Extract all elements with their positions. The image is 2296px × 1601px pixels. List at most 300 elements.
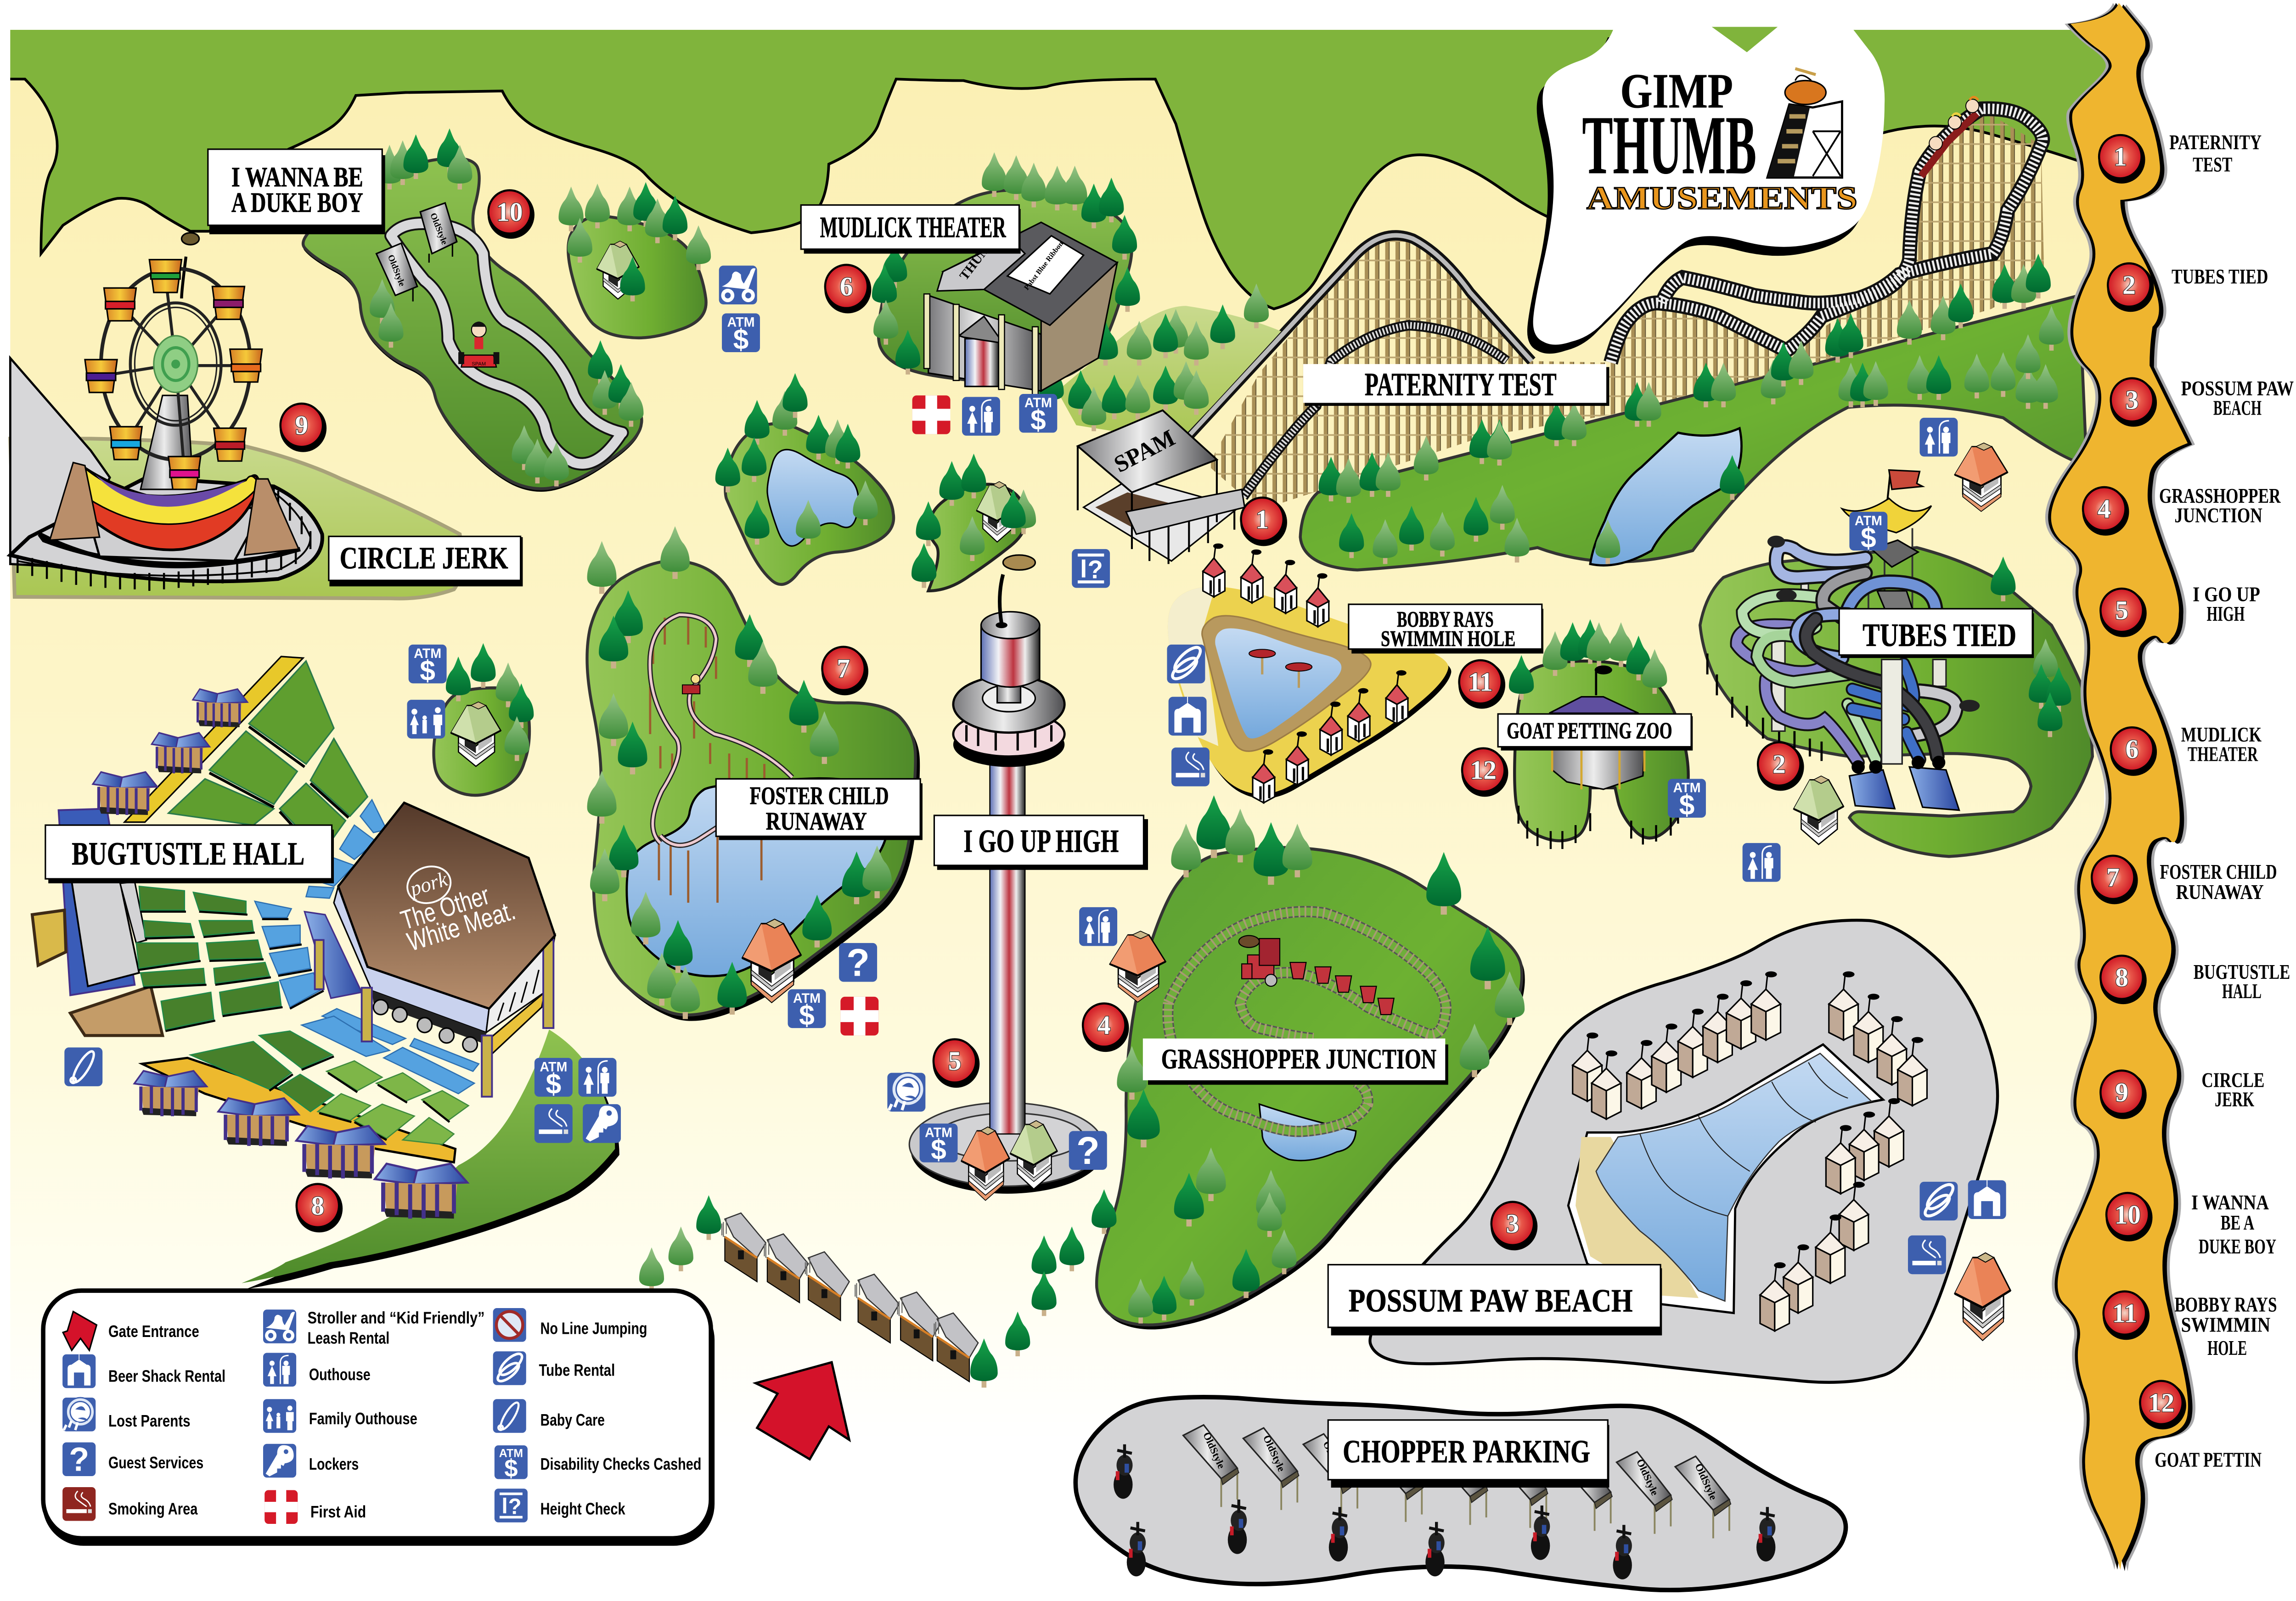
Foster Child Runaway island [587, 526, 920, 1021]
icon: smoking [1908, 1236, 1946, 1274]
badge 8: 8 [311, 1191, 324, 1220]
badge 3 [1491, 1201, 1537, 1250]
legend: lockers [263, 1444, 359, 1477]
hill under the coaster [1300, 295, 2087, 570]
columns [315, 940, 553, 1097]
orange outhouse [743, 919, 801, 1003]
label: Grasshopper Junction [1143, 1039, 1448, 1085]
sign: OldStyle 2 [420, 203, 457, 263]
icon: ATM [722, 313, 760, 355]
grey loop [1823, 573, 1956, 736]
entry 8 [2099, 955, 2290, 1004]
tower and poles [1772, 528, 1946, 764]
fence [1707, 653, 1822, 761]
badge 7: 7 [837, 653, 850, 684]
icon: lockers [583, 1104, 621, 1143]
icon: lost parents [887, 1073, 925, 1112]
badge 6: 6 [840, 271, 853, 302]
legend: family outhouse: Family Outhouse [309, 1410, 417, 1428]
logo: Gimp Thumb Amusements: THUMB [1582, 98, 1756, 191]
trees [446, 643, 534, 761]
entry 5: I GO UP [2193, 583, 2260, 606]
entry 6: MUDLICK [2181, 723, 2262, 746]
theater building [924, 222, 1117, 395]
blue arch [1797, 582, 1936, 658]
entry 1 [2098, 131, 2262, 184]
icon: ATM [788, 989, 826, 1031]
label: Bobby Rays Swimmin Hole: BOBBY RAYS [1397, 607, 1494, 632]
entry 8: HALL [2222, 980, 2262, 1003]
swing base [39, 534, 300, 566]
entry 11: SWIMMIN [2181, 1313, 2270, 1337]
top cylinder [981, 625, 1040, 687]
badge 2: 2 [1773, 749, 1786, 779]
stage blue [59, 809, 135, 995]
entry 9: JERK [2215, 1088, 2254, 1111]
legend: tube rental [493, 1350, 615, 1385]
label: I Wanna Be A Duke Boy [208, 149, 385, 234]
slide tubes [1737, 547, 1956, 763]
entry 11 [2102, 1290, 2277, 1359]
entry 7 [2091, 854, 2277, 904]
icon: outhouse [579, 1058, 616, 1097]
badge 4 [1082, 1002, 1129, 1052]
icon: ATM: $ [1861, 522, 1876, 554]
beach cabanas [1573, 972, 1927, 1331]
icon: guest services: ? [1076, 1129, 1100, 1172]
badge 2 [1757, 741, 1804, 791]
parking sheds: OldStyle [1201, 1430, 1227, 1471]
island trees [872, 152, 1269, 431]
wheel rims [101, 269, 250, 473]
gate entrance arrow [755, 1362, 849, 1459]
icon: ATM: $ [1679, 789, 1694, 820]
small island near Bugtustle [434, 643, 534, 795]
icon: ATM [409, 645, 447, 686]
map icons [64, 265, 2006, 1274]
legend: stroller: Leash Rental [308, 1329, 389, 1347]
lake island [715, 373, 894, 584]
Swimmin Hole [1168, 544, 1451, 803]
Spam station: SPAM [1110, 425, 1179, 478]
legend: disability checks cashed: $ [504, 1455, 518, 1482]
entry 1: PATERNITY [2169, 131, 2262, 154]
Paternity Test coaster [1189, 97, 2087, 570]
label: I Go Up High: I GO UP HIGH [963, 823, 1119, 859]
theater building: THUMB [957, 234, 999, 283]
parking sheds: OldStyle [1693, 1461, 1719, 1502]
icon: beer shack [1169, 697, 1207, 736]
green hills background [0, 15, 2123, 309]
cabanas [1203, 544, 1408, 803]
shaft [990, 761, 1025, 1134]
label: Tubes Tied: TUBES TIED [1863, 618, 2016, 653]
roof advertisement: The Other [398, 880, 493, 936]
legend: smoking area [62, 1487, 198, 1521]
badge 1: 1 [1255, 504, 1269, 534]
blue seating [255, 800, 479, 1094]
entrance gate row [722, 1213, 978, 1382]
entry 6: THEATER [2188, 742, 2258, 765]
icon: outhouse [1919, 418, 1958, 456]
wheel tower [141, 395, 193, 489]
platform [10, 477, 322, 581]
logo coaster [1767, 68, 1842, 178]
badge 10: 10 [496, 197, 523, 227]
outhouse: Tubes Tied upper [1955, 443, 2008, 511]
water tables [1249, 649, 1312, 688]
legend: disability checks cashed [495, 1445, 701, 1482]
label: Bobby Rays Swimmin Hole [1349, 604, 1543, 653]
label: Chopper Parking [1328, 1420, 1609, 1488]
legend: lost parents [62, 1398, 191, 1432]
ribbon [2045, 3, 2195, 1571]
blue side block [304, 912, 362, 998]
icon: smoking [1171, 747, 1210, 786]
label: Bobby Rays Swimmin Hole: SWIMMIN HOLE [1381, 627, 1515, 651]
logo: Gimp Thumb Amusements [1527, 27, 1885, 354]
roof advertisement [389, 845, 519, 957]
trees [715, 373, 878, 545]
light seating [318, 1061, 468, 1145]
lavender top loop [1776, 547, 1865, 578]
label: Goat Petting Zoo [1498, 714, 1693, 751]
label: I Wanna Be A Duke Boy: I WANNA BE [231, 162, 363, 193]
legend: beer shack rental: Beer Shack Rental [108, 1367, 225, 1385]
lift hill track [1189, 236, 1531, 436]
I Go Up High tower [909, 555, 1104, 1201]
label: I Go Up High [934, 815, 1148, 870]
badge 5: 5 [948, 1046, 961, 1076]
icon: outhouse [1743, 843, 1781, 882]
plaza [911, 1107, 1104, 1194]
entry 10: I WANNA [2191, 1191, 2269, 1214]
sign: OldStyle 2: OldStyle [428, 212, 449, 246]
lower blue [1852, 664, 1919, 759]
label: Possum Paw Beach: POSSUM PAW BEACH [1349, 1283, 1632, 1319]
green tubes [1743, 595, 1876, 759]
sign: OldStyle 1: OldStyle [386, 253, 407, 288]
hall facade [334, 886, 489, 1033]
slide tips [1767, 536, 1980, 712]
mini coaster [650, 615, 792, 903]
icon: first aid [912, 395, 951, 434]
Bugtustle Hall [32, 657, 619, 1289]
entry 2: TUBES TIED [2172, 265, 2268, 288]
spotlights [373, 1000, 478, 1052]
legend: outhouse [263, 1353, 371, 1387]
legend: height check: Height Check [540, 1500, 625, 1518]
icon: ATM: ATM [540, 1060, 567, 1074]
island with green outhouse [912, 454, 1036, 591]
legend: gate entrance [63, 1312, 199, 1350]
entry 8: 8 [2115, 962, 2128, 992]
pond [1259, 1104, 1356, 1161]
legend: no line jumping: No Line Jumping [540, 1319, 647, 1337]
label: Paternity Test [1303, 364, 1609, 406]
kart track [391, 223, 622, 464]
map number badges [279, 189, 1804, 1250]
entry 11: 11 [2112, 1298, 2137, 1328]
dark tube [1806, 619, 1937, 757]
front pole [1882, 659, 1902, 764]
Grasshopper Junction island [1097, 795, 1525, 1330]
badge 5 [933, 1038, 979, 1088]
legend panel [42, 1291, 715, 1546]
small island with outhouse [559, 182, 711, 338]
label: Goat Petting Zoo: GOAT PETTING ZOO [1507, 718, 1672, 744]
entry 9: 9 [2115, 1077, 2128, 1107]
legend: family outhouse [263, 1399, 417, 1433]
icon: height check [1072, 549, 1110, 588]
badge 1 [1240, 497, 1287, 546]
row shadows [139, 912, 450, 1140]
gate trees [639, 1189, 1116, 1388]
train track [1168, 911, 1446, 1131]
outhouse: Grasshopper [1110, 931, 1165, 1002]
entry 11: HOLE [2207, 1336, 2247, 1359]
label: Circle Jerk: CIRCLE JERK [340, 541, 508, 575]
yellow walkway [142, 1058, 456, 1163]
badge 11: 11 [1468, 667, 1493, 697]
entry 12: GOAT PETTIN [2155, 1448, 2262, 1472]
legend: stroller [263, 1309, 484, 1347]
entry 7: RUNAWAY [2176, 881, 2264, 904]
badge 4: 4 [1097, 1010, 1111, 1040]
roof advertisement: pork [406, 867, 450, 901]
legend: tube rental: Tube Rental [539, 1361, 615, 1379]
label: Mudlick Theater [801, 205, 1021, 253]
entry 3: BEACH [2213, 396, 2262, 420]
entry 10: 10 [2115, 1199, 2141, 1230]
legend: lost parents: Lost Parents [108, 1411, 191, 1430]
parking sheds: OldStyle [1261, 1433, 1287, 1473]
badge 3: 3 [1506, 1208, 1519, 1238]
crescent swing [77, 467, 259, 550]
icon: ATM: ATM [1855, 514, 1882, 528]
entry 3: 3 [2126, 385, 2138, 415]
icon: ATM: $ [420, 655, 435, 686]
Duke Boy go-kart track [303, 128, 643, 492]
legend: baby care: Baby Care [540, 1411, 605, 1429]
icon: ATM: $ [799, 1000, 815, 1031]
Chopper Parking [1075, 1397, 1846, 1590]
badge 7 [821, 646, 868, 695]
icon: tube rental [1919, 1181, 1958, 1220]
food booths [93, 689, 467, 1219]
waves [1640, 1062, 1848, 1216]
label: Possum Paw Beach [1328, 1265, 1662, 1336]
upper seating [169, 661, 367, 854]
label: Tubes Tied [1839, 609, 2034, 658]
legend: gate entrance: Gate Entrance [108, 1322, 199, 1341]
go-kart [458, 321, 499, 367]
entry 5: 5 [2115, 595, 2128, 625]
legend: stroller: Stroller and “Kid Friendly” [308, 1309, 484, 1327]
wooden structure [1208, 109, 2044, 510]
icon: ATM: $ [546, 1068, 561, 1100]
motorcycles [1114, 1444, 1775, 1579]
icon: ATM: ATM [414, 646, 441, 661]
ride list strip [2045, 3, 2294, 1571]
train [1239, 936, 1394, 1015]
trees [1117, 795, 1525, 1324]
tower canopy and flag [1842, 470, 1931, 533]
icon: height check: ? [1088, 555, 1103, 584]
icon: ATM: $ [733, 324, 748, 355]
legend: height check: ? [508, 1494, 522, 1519]
Spam station [1078, 410, 1244, 564]
entry 5: HIGH [2206, 602, 2245, 625]
side hill [246, 1035, 619, 1289]
entry 2 [2107, 262, 2268, 312]
legend: beer shack rental [62, 1354, 225, 1388]
legend: baby care [493, 1399, 605, 1433]
icon: guest services [839, 941, 877, 984]
icon: smoking [535, 1104, 573, 1143]
fence [17, 486, 310, 591]
outhouses [1010, 1121, 1057, 1189]
icon: ATM [920, 1124, 957, 1165]
label: Foster Child Runaway [716, 779, 923, 840]
observation deck [953, 722, 1064, 767]
entry 10: BE A [2221, 1211, 2254, 1234]
legend: first aid: First Aid [310, 1503, 366, 1521]
trees [1991, 556, 2071, 737]
entry 5 [2099, 583, 2260, 637]
icon: ATM: $ [1030, 404, 1046, 436]
label: Bugtustle Hall: BUGTUSTLE HALL [72, 836, 304, 872]
entry 2: 2 [2122, 270, 2136, 300]
outhouse: Tubes Tied lower [1794, 776, 1844, 844]
lake in hill [1590, 428, 1742, 565]
mini coaster car [682, 674, 700, 694]
entry 10 [2105, 1191, 2276, 1258]
icon: ATM: ATM [925, 1125, 952, 1140]
entry 7: 7 [2106, 862, 2120, 892]
icon: beer shack [1968, 1180, 2006, 1219]
Goat Petting Zoo island [1509, 619, 1688, 849]
sign: OldStyle 1 [377, 243, 417, 303]
entry 1: 1 [2114, 141, 2127, 172]
dark seating [136, 886, 334, 1112]
purple tubes [1737, 625, 1858, 763]
logo: Gimp Thumb Amusements: GIMP [1620, 63, 1733, 118]
entry 9 [2099, 1068, 2264, 1119]
legend: guest services [62, 1441, 203, 1478]
entry 4 [2082, 484, 2281, 536]
icon: guest services: ? [846, 941, 870, 984]
lake [627, 778, 889, 976]
outhouse: Beach [1955, 1253, 2010, 1341]
label: Grasshopper Junction: GRASSHOPPER JUNCTION [1161, 1043, 1436, 1075]
olive hill [10, 438, 462, 599]
label: Chopper Parking: CHOPPER PARKING [1343, 1433, 1590, 1470]
go-kart: SPAM [472, 361, 486, 367]
coaster car with kids [1921, 97, 1979, 176]
parking sheds [1183, 1425, 1731, 1539]
legend: disability checks cashed: Disability Checks Cashed [540, 1455, 701, 1473]
legend: guest services: ? [69, 1441, 89, 1478]
entry 12: 12 [2148, 1388, 2174, 1417]
badge 8 [295, 1183, 343, 1232]
parking sheds: OldStyle [1321, 1439, 1347, 1479]
icon: ATM [535, 1058, 573, 1100]
entry 4: JUNCTION [2174, 504, 2262, 527]
hall roof [338, 803, 555, 1009]
icon: outhouse [962, 397, 1000, 436]
badge 11 [1458, 659, 1505, 709]
trees [559, 182, 711, 301]
upper track [1611, 109, 2043, 363]
entry 12 [2139, 1380, 2262, 1472]
legend: height check [495, 1489, 625, 1522]
icon: ATM [1019, 394, 1057, 436]
legend: lockers: Lockers [309, 1455, 359, 1473]
icon: tube rental [1167, 644, 1205, 683]
wheel buckets [85, 259, 262, 489]
icon: ATM: ATM [727, 315, 755, 330]
fence [1519, 806, 1678, 849]
lower track [1243, 325, 1507, 497]
Possum Paw Beach [1370, 920, 1998, 1382]
wave pool [1568, 1045, 1883, 1313]
label: Foster Child Runaway: FOSTER CHILD [750, 781, 889, 810]
light green slope [1057, 306, 1281, 442]
icon: baby care [64, 1047, 102, 1086]
legend: no line jumping [493, 1308, 647, 1342]
icon: ATM: ATM [1673, 781, 1700, 796]
entry 9: CIRCLE [2201, 1068, 2264, 1092]
entry 6 [2110, 723, 2262, 776]
entry 6: 6 [2126, 734, 2138, 764]
tent supports [50, 462, 100, 540]
slide feet [1849, 757, 1959, 810]
trees [912, 454, 1036, 588]
badge 9: 9 [295, 410, 308, 440]
label: Bugtustle Hall [45, 825, 334, 883]
icon: outhouse [1079, 907, 1117, 946]
label: Foster Child Runaway: RUNAWAY [766, 807, 867, 835]
badge 12 [1461, 747, 1508, 797]
Tubes Tied water park [1700, 470, 2093, 856]
icon: ATM [1668, 779, 1706, 820]
badge 9 [279, 403, 326, 452]
icon: first aid [840, 997, 878, 1035]
parking sheds: OldStyle [1634, 1457, 1660, 1497]
entry 1: TEST [2193, 153, 2232, 176]
theater building: Pabst Blue Ribbon [1023, 240, 1065, 292]
legend: guest services: Guest Services [108, 1453, 203, 1472]
zoo building [1549, 665, 1644, 789]
icon: family outhouse [407, 700, 445, 739]
icon: guest services [1069, 1129, 1107, 1172]
track trees [370, 128, 643, 486]
entry 3 [2110, 377, 2294, 427]
legend: first aid [264, 1490, 366, 1524]
badge 6 [824, 264, 871, 313]
icon: stroller [719, 265, 757, 304]
trees [587, 526, 892, 1019]
label: Circle Jerk [329, 536, 523, 586]
badge 12: 12 [1470, 755, 1497, 785]
icon: ATM [1849, 512, 1887, 554]
Mudlick Theater island [872, 152, 1281, 442]
label: Paternity Test: PATERNITY TEST [1365, 367, 1557, 403]
logo: Gimp Thumb Amusements: AMUSEMENTS [1587, 180, 1857, 216]
icon: ATM: ATM [1024, 396, 1052, 410]
icon: ATM: ATM [793, 991, 821, 1006]
